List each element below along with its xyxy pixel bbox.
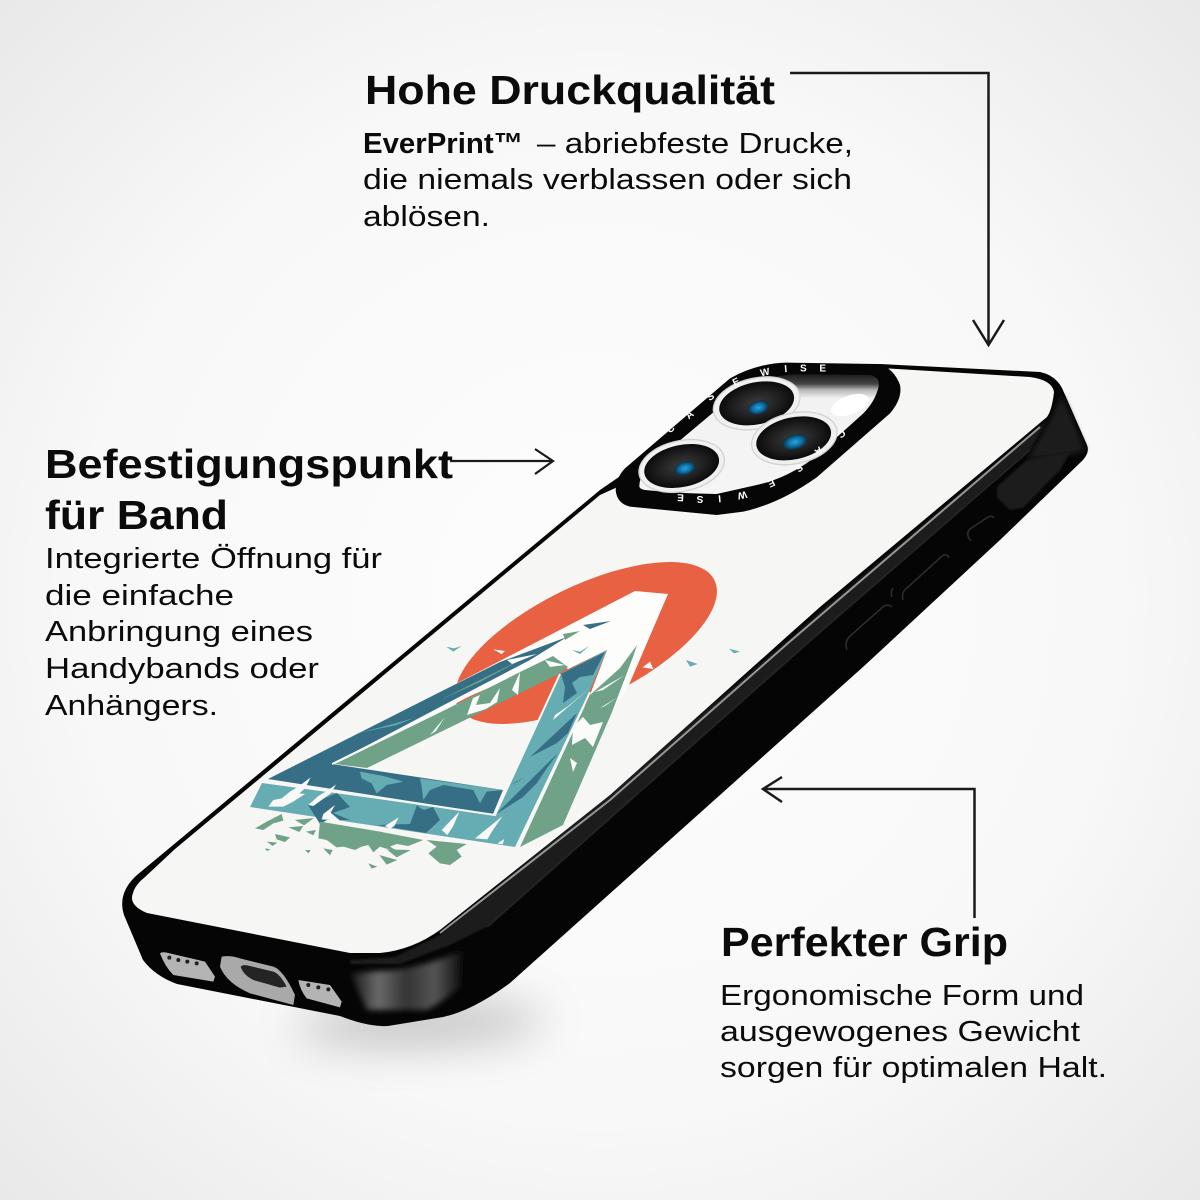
triangle dark band (268, 637, 567, 814)
teal patches (357, 718, 503, 803)
triangle apex (440, 591, 668, 712)
brand lettering: I (717, 492, 721, 503)
forest silhouette (255, 814, 467, 869)
artwork: sun and impossible triangle (250, 529, 740, 869)
heading: grip: Perfekter Grip (721, 919, 1008, 965)
body: grip: ausgewogenes Gewicht (720, 1016, 1080, 1048)
charging port (220, 956, 295, 1005)
lens right (747, 405, 842, 472)
camera window (639, 374, 879, 494)
body: strap attachment (45, 543, 382, 722)
brand lettering: C (835, 427, 847, 440)
snow trees (268, 777, 504, 844)
brand lettering: E (731, 376, 742, 389)
white line under dark band (332, 656, 545, 764)
lens top (708, 369, 805, 437)
arrow: strap attachment (450, 449, 553, 474)
body: strap attachment: Anbringung eines (45, 616, 313, 648)
brand lettering: W (759, 366, 771, 379)
green right band (520, 645, 637, 847)
body: strap attachment: Handybands oder (45, 653, 319, 685)
text block: strap attachment (45, 441, 453, 722)
brand lettering: I (784, 364, 788, 375)
brand lettering: S (696, 493, 703, 504)
phone shadow (294, 998, 546, 1050)
heading: strap attachment (45, 441, 453, 538)
body: grip: sorgen für optimalen Halt. (720, 1052, 1107, 1084)
flash (828, 389, 872, 421)
brand lettering: E (819, 363, 826, 374)
body: print quality: ablösen. (363, 201, 490, 233)
body: strap attachment: die einfache (45, 580, 234, 612)
heading: strap attachment: für Band (45, 492, 228, 538)
brand lettering: A (684, 409, 696, 422)
camera bump frame (616, 363, 900, 515)
brand lettering: W (736, 488, 748, 501)
side edge highlight (440, 427, 1040, 933)
white streak on teal band (553, 688, 590, 720)
brand lettering: S (793, 461, 805, 474)
dark band teal patches and forest (255, 718, 504, 869)
body: grip: Ergonomische Form und (720, 980, 1084, 1012)
right speaker (298, 980, 342, 1007)
brand lettering: A (812, 444, 825, 457)
body: strap attachment: Anhängers. (45, 690, 218, 722)
brand lettering: C (665, 423, 677, 436)
white separators (264, 674, 590, 848)
arrow: print quality (790, 73, 1004, 345)
lens left (634, 432, 729, 500)
upper corner shading (1027, 395, 1085, 460)
phone case (122, 364, 1088, 1026)
screen back panel (132, 368, 1054, 953)
camera module (616, 363, 900, 515)
triangle teal band (250, 650, 607, 847)
side bevel (350, 420, 1047, 964)
body: grip (720, 980, 1107, 1084)
birds (446, 646, 740, 669)
action button pad (997, 452, 1070, 510)
heading: strap attachment: Befestigungspunkt (45, 441, 453, 487)
body: strap attachment: Integrierte Öffnung für (45, 543, 382, 575)
brand lettering: E (765, 476, 776, 489)
bottom ports (160, 952, 342, 1007)
triangle green upper band (335, 656, 568, 768)
side buttons (846, 516, 994, 650)
brand lettering: S (800, 363, 807, 374)
snow on green right band (570, 675, 625, 772)
brand lettering: S (705, 391, 717, 404)
sun (432, 529, 740, 757)
case body (122, 364, 1088, 1026)
text block: print quality (363, 67, 853, 233)
brand lettering: E (677, 491, 684, 502)
text block: grip (720, 919, 1107, 1084)
body: print quality: – abriebfeste Drucke, (537, 128, 853, 160)
body: print quality: EverPrint™ (363, 128, 523, 160)
dark band streaks (440, 621, 611, 700)
side groove (487, 450, 1030, 927)
body: print quality (363, 128, 853, 233)
snow on green upper band (420, 660, 565, 748)
teal band dark patches (308, 652, 605, 833)
left speaker (160, 952, 215, 982)
body: print quality: die niemals verblassen oder sich (363, 164, 852, 196)
heading: print quality: Hohe Druckqualität (365, 67, 775, 113)
arrow: grip (763, 777, 974, 918)
brand lettering (665, 363, 847, 504)
corner highlight (350, 950, 463, 1010)
